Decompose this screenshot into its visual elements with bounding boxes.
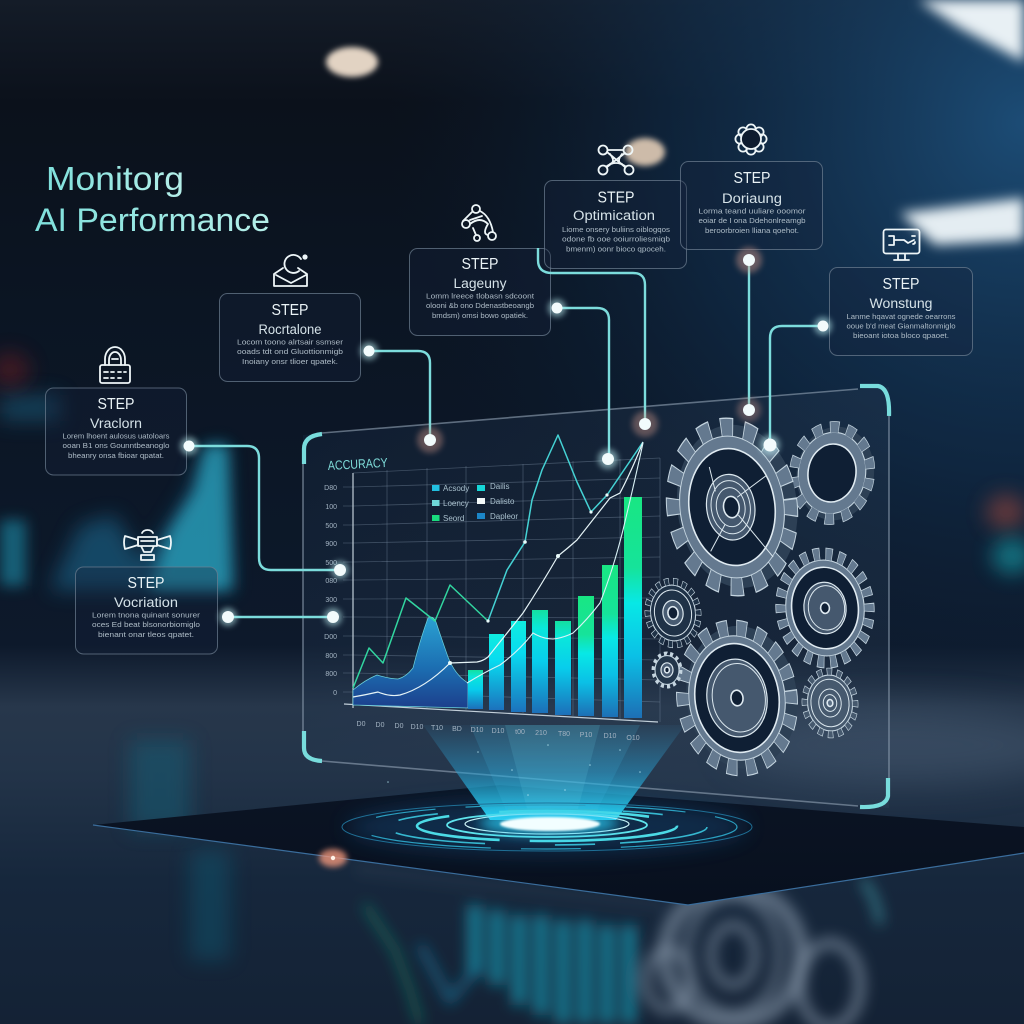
step card: Doriaung: [680, 162, 822, 250]
step card: Vocriation: STEP: [128, 575, 164, 592]
step card: Doriaung: Doriaung: [722, 191, 782, 206]
gear: large top: [663, 417, 808, 596]
legend: Dapleor: [490, 512, 518, 521]
gear: middle right: [775, 550, 875, 666]
step card: Rocrtalone: Locom toono alrtsair ssmser: [237, 338, 344, 346]
step card: Doriaung: beroorbroien lliana qoehot.: [705, 226, 799, 235]
step card: Optimication: [544, 180, 686, 268]
step card: Vraclorn: Vraclorn: [90, 416, 142, 431]
y axis labels: 080: [325, 578, 337, 585]
gears cluster: [644, 417, 880, 777]
axes: [344, 473, 658, 722]
data points: [448, 493, 609, 665]
x axis labels: t00: [515, 729, 525, 736]
green line: [353, 585, 488, 688]
icon: monitor with signal: [884, 230, 920, 260]
white line two: [467, 443, 643, 683]
step card: Lageuny: Lomm lreece tlobasn sdcoont: [426, 292, 534, 300]
x axis labels: D0: [357, 721, 366, 728]
grid: [343, 458, 660, 722]
gear: small right lower: [802, 669, 858, 737]
x axis labels: [357, 721, 640, 742]
y axis labels: 0: [333, 690, 337, 697]
step card: Doriaung: eoiar de I ona Ddehonlreamgb: [698, 216, 806, 225]
y axis labels: 900: [325, 541, 337, 548]
step card: Doriaung: STEP: [734, 170, 770, 187]
x axis labels: BD: [452, 726, 462, 733]
step card: Lageuny: STEP: [462, 256, 498, 273]
bar series: [468, 497, 642, 718]
white line one: [353, 442, 643, 697]
x axis labels: 210: [535, 730, 547, 737]
x axis labels: T80: [558, 731, 570, 738]
step card: Wonstung: Wonstung: [870, 296, 932, 311]
connector lines: [189, 248, 823, 617]
connector nodes: [180, 247, 832, 626]
teal line: [488, 435, 643, 621]
step card: Vraclorn: STEP: [98, 396, 134, 413]
title: Monitorg: [46, 160, 184, 197]
step card: Optimication: STEP: [598, 190, 634, 206]
hologram beam: [387, 725, 685, 820]
y axis labels: 800: [325, 653, 337, 660]
step card: Wonstung: [830, 268, 972, 356]
y axis labels: D00: [324, 634, 337, 641]
step card: Rocrtalone: STEP: [272, 302, 308, 319]
step card: Wonstung: STEP: [882, 276, 920, 293]
icon: molecule figure: [462, 205, 496, 241]
step card: Wonstung: bieoant iotoa bloco qpaoet.: [853, 331, 949, 340]
gear: top right: [788, 421, 880, 525]
step card: Vraclorn: ooan B1 ons Gounntbeanoglo: [62, 441, 170, 450]
panel corner brackets: [304, 386, 889, 807]
gear: large bottom: [674, 619, 806, 777]
legend: Dalisto: [490, 497, 515, 506]
step card: Optimication: Optimication: [573, 208, 655, 223]
holographic rings: [342, 803, 752, 851]
y axis labels: 100: [325, 504, 337, 511]
y axis labels: [324, 485, 337, 697]
step card: Vocriation: Lorem tnona quinant sonurer: [92, 610, 201, 620]
icon: ring of circles: [735, 124, 767, 155]
gear: small left lower: [654, 654, 680, 686]
legend: Loency: [443, 499, 469, 508]
step card: Lageuny: bmdsm) omsi bowo opatiek.: [432, 311, 528, 320]
icon: padlock: [100, 347, 130, 383]
legend: [432, 482, 518, 523]
title: AI Performance: [35, 202, 270, 238]
step card: Vocriation: Vocriation: [114, 595, 178, 610]
x axis labels: D10: [411, 724, 424, 731]
legend: Seord: [443, 514, 464, 523]
step card: Rocrtalone: Inoiany onsr tlioer qpatek.: [242, 357, 338, 366]
y axis labels: D80: [324, 485, 337, 492]
chart: [324, 435, 660, 742]
step card: Vraclorn: Lorem lhoent aulosus uatoloars: [62, 432, 170, 440]
step card: Optimication: Liome onsery buliins oiblogqos: [562, 225, 670, 234]
area series: [353, 617, 468, 708]
step card: Wonstung: Lanme hqavat ognede oearrons: [846, 312, 956, 321]
step card: Rocrtalone: Rocrtalone: [258, 322, 322, 337]
x axis labels: P10: [580, 732, 592, 739]
legend: Acsody: [443, 484, 469, 493]
title: [35, 160, 270, 238]
y axis labels: 300: [325, 597, 337, 604]
gear: small left upper: [644, 578, 702, 648]
icon: trophy: [124, 530, 171, 560]
legend: Dailis: [490, 482, 510, 491]
step card: Vraclorn: bheanry onsa fbioar qpatat.: [68, 451, 164, 460]
platform: [93, 785, 1024, 905]
x axis labels: D0: [376, 722, 385, 729]
y axis labels: 500: [325, 523, 337, 530]
step card: Lageuny: [410, 248, 550, 336]
icon: drone network: [598, 146, 634, 174]
step card: Vocriation: [76, 567, 218, 654]
step card: Doriaung: Lorma teand uuliare ooomor: [698, 206, 806, 216]
step card: Wonstung: ooue b'd meat Gianmaltonmiglo: [846, 322, 956, 330]
step card: Vocriation: oces Ed beat blsonorbiomiglo: [92, 620, 200, 629]
icon: person with envelope: [274, 254, 308, 286]
step card: Optimication: odone fb ooe ooiurroliesmiqb: [562, 234, 670, 244]
x axis labels: D10: [471, 727, 484, 734]
glass chart panel: [303, 386, 889, 808]
x axis labels: D10: [492, 728, 505, 735]
floor reflection of chart and gears: [360, 870, 880, 1024]
chart title: ACCURACY: [327, 455, 388, 473]
x axis labels: T10: [431, 725, 443, 732]
step card: Lageuny: Lageuny: [454, 276, 507, 291]
x axis labels: D0: [395, 723, 404, 730]
step card: Rocrtalone: ooads tdt ond Gluottionmigb: [237, 347, 343, 356]
y axis labels: 800: [325, 671, 337, 678]
y axis labels: 500: [325, 560, 337, 567]
step card: Optimication: bmenm) oonr bioco qpoceh.: [566, 244, 666, 254]
step card: Rocrtalone: [220, 294, 360, 382]
step card: Vraclorn: [46, 388, 186, 475]
step card: Vocriation: bienant onar tleos qpatet.: [98, 630, 194, 639]
x axis labels: O10: [626, 735, 640, 742]
step card: Lageuny: olooni &b ono Ddenastbeoangb: [426, 301, 534, 310]
x axis labels: D10: [604, 733, 617, 740]
